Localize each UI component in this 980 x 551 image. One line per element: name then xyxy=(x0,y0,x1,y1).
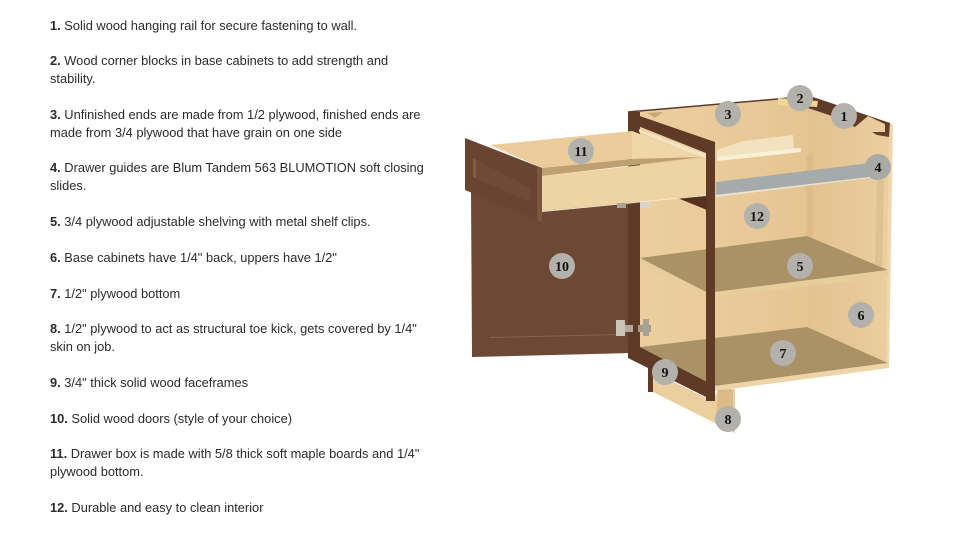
text: item 4: 4. Drawer guides are Blum Tandem 563 BLUMOTION soft closing xyxy=(50,160,424,175)
badge 3: 3 xyxy=(724,108,732,123)
badge 5: 5 xyxy=(796,260,804,275)
text: item 3: 3. Unfinished ends are made from 1/2 plywood, finished ends are xyxy=(50,107,421,122)
drawer xyxy=(465,129,706,222)
badge 8 xyxy=(715,406,741,432)
drawer back wall xyxy=(490,131,632,168)
badge 4: 4 xyxy=(874,161,882,176)
text: item 11: plywood bottom. xyxy=(50,464,144,479)
top edge xyxy=(628,96,812,112)
text: item 8: 8. 1/2" plywood to act as structural toe kick, gets covered by 1/4" xyxy=(50,321,417,336)
text: item 7: 7. 1/2" plywood bottom xyxy=(50,286,180,301)
badge 9 xyxy=(652,359,678,385)
badge 2: 2 xyxy=(796,92,804,107)
drawer slide clips xyxy=(617,203,626,208)
badge 6 xyxy=(848,302,874,328)
badge 10: 10 xyxy=(555,260,569,275)
text: item 8: skin on job. xyxy=(50,339,115,354)
drawer face xyxy=(465,138,542,222)
badge 5 xyxy=(787,253,813,279)
drawer front box xyxy=(542,158,706,211)
text: item 3: made from 3/4 plywood that have grain on one side xyxy=(50,125,342,140)
badge 12 xyxy=(744,203,770,229)
ledger strip xyxy=(717,135,801,161)
text: item 4 xyxy=(50,160,424,193)
badge 2 xyxy=(787,85,813,111)
text: item 9: 9. 3/4" thick solid wood faceframes xyxy=(50,375,248,390)
badge 10 xyxy=(549,253,575,279)
text: item 5: 5. 3/4 plywood adjustable shelving with metal shelf clips. xyxy=(50,214,371,229)
floor xyxy=(640,327,888,386)
text: item 11: 11. Drawer box is made with 5/8 thick soft maple boards and 1/4" xyxy=(50,446,419,461)
cabinet body xyxy=(628,96,893,391)
badge 12: 12 xyxy=(750,210,764,225)
upper shadows xyxy=(806,155,813,236)
drawer floor xyxy=(542,157,702,176)
text: item 2: stability. xyxy=(50,71,95,86)
text: item 11 xyxy=(50,446,419,479)
door xyxy=(471,190,640,358)
face frame xyxy=(628,112,715,401)
hanging rail and corner blocks xyxy=(778,97,890,137)
shelf xyxy=(640,236,888,292)
text: item 2 xyxy=(50,53,388,86)
badge 1 xyxy=(831,103,857,129)
badge 11 xyxy=(568,138,594,164)
text: item 10: 10. Solid wood doors (style of your choice) xyxy=(50,411,292,426)
toe kick xyxy=(648,361,735,433)
badge 9: 9 xyxy=(662,366,668,381)
text: item 1: 1. Solid wood hanging rail for secure fastening to wall. xyxy=(50,18,357,33)
badge 4 xyxy=(865,154,891,180)
badge 6: 6 xyxy=(858,309,864,324)
badge 7: 7 xyxy=(780,347,786,362)
back panel xyxy=(628,96,808,352)
text: item 6: 6. Base cabinets have 1/4" back, uppers have 1/2" xyxy=(50,250,337,265)
drawer side wall xyxy=(632,131,702,159)
badge 11: 11 xyxy=(574,145,588,160)
drawer rail xyxy=(639,129,706,158)
right side panel xyxy=(808,96,892,367)
metal guide xyxy=(716,163,870,195)
hinge xyxy=(616,319,651,336)
text: item 12: 12. Durable and easy to clean interior xyxy=(50,500,263,515)
badge 1: 1 xyxy=(840,110,848,125)
badge 3 xyxy=(715,101,741,127)
text: item 8 xyxy=(50,321,417,354)
text: item 2: 2. Wood corner blocks in base cabinets to add strength and xyxy=(50,53,388,68)
text: item 3 xyxy=(50,107,421,140)
badge 8: 8 xyxy=(724,413,732,428)
badge 7 xyxy=(770,340,796,366)
text: item 4: slides. xyxy=(50,178,86,193)
